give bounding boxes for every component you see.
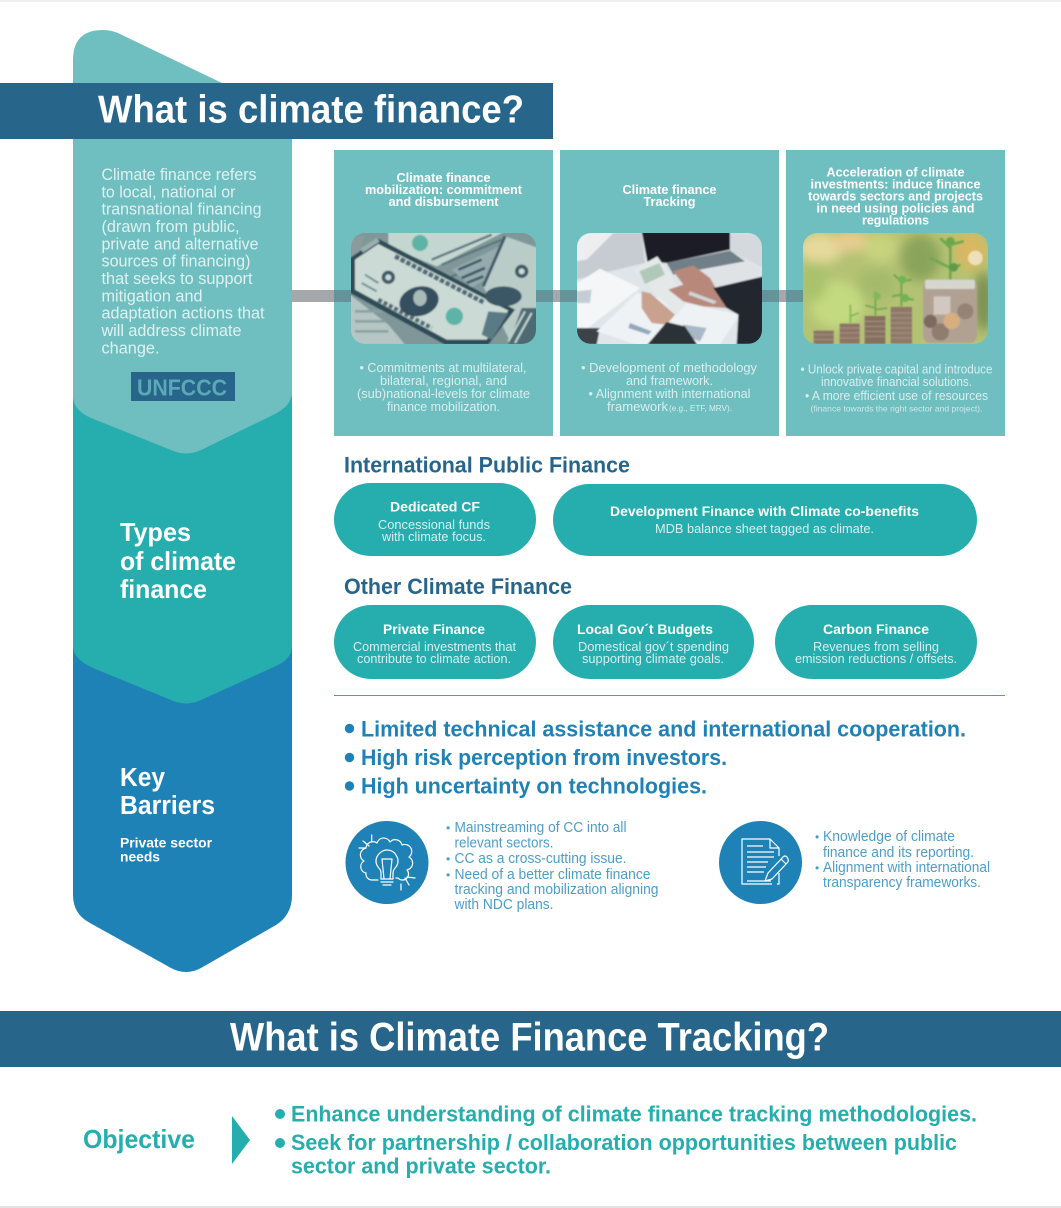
panel: climate finance tracking: framework [607,399,668,414]
definition text: (drawn from public, [102,217,240,236]
panel: climate finance tracking: • Alignment with international [588,386,751,401]
barrier list: knowledge: finance and its reporting. [823,845,974,861]
panel: climate finance tracking: and framework. [626,373,713,388]
panel: climate finance tracking: (e.g., ETF, MRV). [669,404,732,413]
pill: private finance: Private Finance [383,621,485,637]
panel: acceleration of climate investments: investments: induce finance [810,176,980,192]
panel: climate finance mobilization: bilateral, regional, and [380,373,507,388]
pill: dedicated CF: Dedicated CF [390,499,480,515]
objective label: Objective [83,1124,195,1154]
banner: what is climate finance tracking [0,1011,1061,1067]
label: types of climate finance [120,517,236,604]
barrier list: sectors: Mainstreaming of CC into all [454,820,626,836]
panel: acceleration of climate investments: Acceleration of climate [826,164,964,180]
pill: private finance: Commercial investments that [353,639,516,654]
pill: dedicated CF: with climate focus. [381,529,486,544]
pill: carbon finance: Revenues from selling [813,639,939,654]
photo: dollar bills [351,233,536,344]
panel: climate finance mobilization: finance mobilization. [387,399,500,414]
key barriers list: Limited technical assistance and international cooperation. [361,717,966,742]
panel: acceleration of climate investments: towards sectors and projects [808,188,983,204]
pill: local government budgets: Local Gov´t Budgets [577,621,713,637]
pill: development finance [553,484,977,556]
panel: climate finance mobilization: mobilization: commitment [365,182,523,197]
barrier list: sectors: Need of a better climate finance [454,867,650,883]
barrier list: knowledge: transparency frameworks. [823,875,981,891]
chevron: types of climate finance [73,390,292,704]
panel: acceleration of climate investments [786,150,1005,436]
definition text: adaptation actions that [102,304,265,323]
label: key barriers: needs [120,850,160,865]
definition text: that seeks to support [102,269,253,288]
label: key barriers: Barriers [120,792,215,820]
objective list: sector and private sector. [291,1154,551,1178]
icon: document and pencil [719,821,802,904]
photo: coins and seedlings [803,233,988,344]
banner: what is climate finance tracking: What is Climate Finance Tracking? [230,1016,829,1060]
barrier list: sectors: with NDC plans. [454,897,554,913]
definition text: transnational financing [102,200,262,219]
panel: climate finance tracking: • Development of methodology [581,360,757,375]
panel: acceleration of climate investments: regulations [862,212,929,228]
label: key barriers [120,764,215,865]
key barriers list: High risk perception from investors. [361,745,727,770]
heading: international public finance: International Public Finance [344,453,630,478]
key barriers list [345,717,966,798]
key barriers list: High uncertainty on technologies. [361,773,707,798]
chevron: key barriers [73,640,292,972]
icon: brain with light bulb [346,821,428,904]
heading: other climate finance: Other Climate Finance [344,574,572,599]
pill: development finance: MDB balance sheet tagged as climate. [655,521,874,536]
panel: acceleration of climate investments: • Unlock private capital and introduce [800,361,992,376]
arrow [232,1116,250,1164]
label: types of climate finance: Types [120,517,191,547]
definition text: Climate finance refers [102,165,256,184]
barrier list: knowledge: • [815,830,819,844]
label: key barriers: Private sector [120,835,213,850]
title banner: What is climate finance? [98,88,524,132]
barrier list: knowledge: Knowledge of climate [823,829,955,845]
barrier list: sectors: • [446,852,450,866]
pill: local government budgets: supporting climate goals. [582,651,724,666]
pill: carbon finance [775,605,977,679]
definition text: to local, national or [102,182,236,201]
panel: acceleration of climate investments: in need using policies and [816,200,975,216]
definition text [101,165,265,357]
panel: acceleration of climate investments: • A more efficient use of resources [805,388,988,403]
pill: carbon finance: emission reductions / offsets. [795,651,957,666]
panel: climate finance mobilization [334,150,553,436]
panel: climate finance tracking: Climate finance [622,182,716,197]
barrier list: sectors: • [446,821,450,835]
label: key barriers: Key [120,764,166,792]
definition text: change. [102,338,160,357]
panel: climate finance mobilization: and disbursement [388,194,499,209]
pill: local government budgets [553,605,754,679]
barrier list: sectors: tracking and mobilization aligning [454,882,658,898]
barrier list: knowledge: Alignment with international [823,860,990,876]
title banner [0,83,553,139]
pill: private finance: contribute to climate action. [357,651,511,666]
panel: climate finance tracking: Tracking [644,194,696,209]
label: types of climate finance: of climate [120,546,236,576]
barrier list: sectors: CC as a cross-cutting issue. [454,851,626,867]
definition text: mitigation and [102,286,202,305]
chevron: definition [73,30,292,454]
pill: dedicated CF: Concessional funds [378,517,490,532]
barrier list: sectors: relevant sectors. [454,836,554,852]
panel: climate finance mobilization: • Commitments at multilateral, [360,360,526,375]
panel: climate finance mobilization: (sub)national-levels for climate [357,386,530,401]
barrier list: knowledge: • [815,861,819,875]
panel: acceleration of climate investments: innovative financial solutions. [821,374,972,389]
barrier list: sectors: • [446,868,450,882]
UNFCCC source tag: UNFCCC [137,374,227,400]
connector bar [292,290,803,302]
pill: local government budgets: Domestical gov´t spending [578,639,729,654]
definition text: will address climate [101,321,242,340]
objective list [275,1102,977,1178]
pill: development finance: Development Finance with Climate co-benefits [610,503,919,519]
barrier list: sectors [446,820,658,913]
panel: acceleration of climate investments: (finance towards the right sector and project). [810,404,982,414]
objective list: Enhance understanding of climate finance tracking methodologies. [291,1102,977,1127]
pill: private finance [334,605,536,679]
photo: calculator and documents [577,233,762,344]
objective list: Seek for partnership / collaboration opportunities between public [291,1130,957,1155]
pill: dedicated CF [334,483,536,556]
definition text: private and alternative [102,234,258,253]
panel: climate finance tracking [560,150,779,436]
label: types of climate finance: finance [120,574,207,604]
definition text: sources of financing) [102,252,250,271]
barrier list: knowledge [815,829,990,891]
panel: climate finance mobilization: Climate finance [396,170,490,185]
pill: carbon finance: Carbon Finance [823,621,929,637]
